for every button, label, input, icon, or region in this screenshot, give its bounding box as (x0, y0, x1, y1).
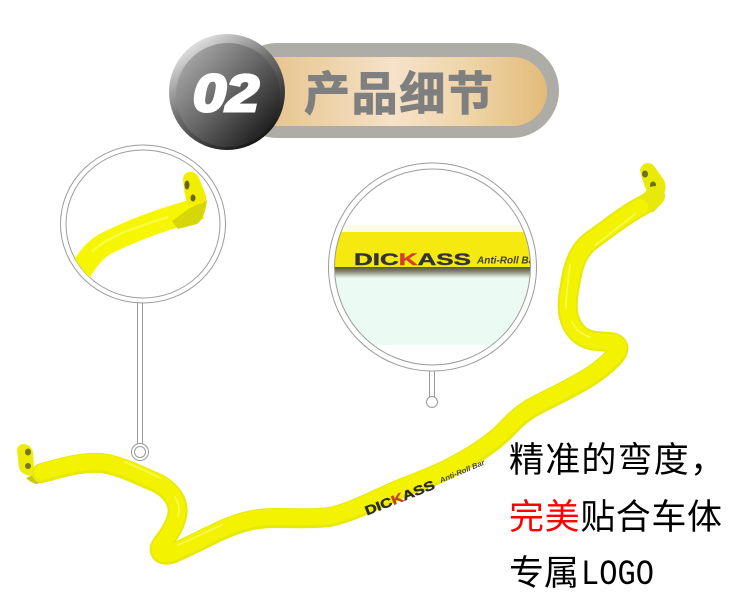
caption text (509, 432, 725, 596)
left mounting plate (17, 444, 55, 484)
caption line 3 (509, 545, 654, 596)
section header badge (169, 34, 559, 150)
full anti-roll bar product (17, 163, 666, 555)
heading: 产品细节 (304, 58, 493, 124)
bar logo text (363, 457, 487, 518)
Anti-Roll Bar label: Anti-Roll Bar (476, 256, 539, 266)
header pill (230, 43, 559, 138)
bar logo text: DICKASS (363, 477, 437, 518)
left magnifier ring (60, 145, 226, 303)
bar tube (42, 196, 655, 555)
right leader line (426, 371, 438, 408)
caption line 3: 专属 (509, 545, 579, 596)
callout: end-link detail circle (60, 145, 226, 460)
left leader line (132, 303, 148, 460)
caption line 2: 完美贴合车体 (509, 489, 722, 540)
bar logo text: Anti-Roll Bar (437, 457, 487, 485)
right mounting plate (635, 163, 666, 214)
number 02: 02 (193, 65, 259, 123)
callout: logo detail circle (328, 163, 539, 408)
DICKASS logo: DIC K ASS (354, 250, 471, 269)
caption line 1: 精准的弯度， (509, 432, 725, 483)
right magnifier ring (328, 163, 536, 371)
logo photo crop (330, 225, 539, 345)
number ball (169, 34, 285, 150)
caption line 3: LOGO (581, 555, 654, 595)
left zoomed bar end (78, 172, 207, 275)
